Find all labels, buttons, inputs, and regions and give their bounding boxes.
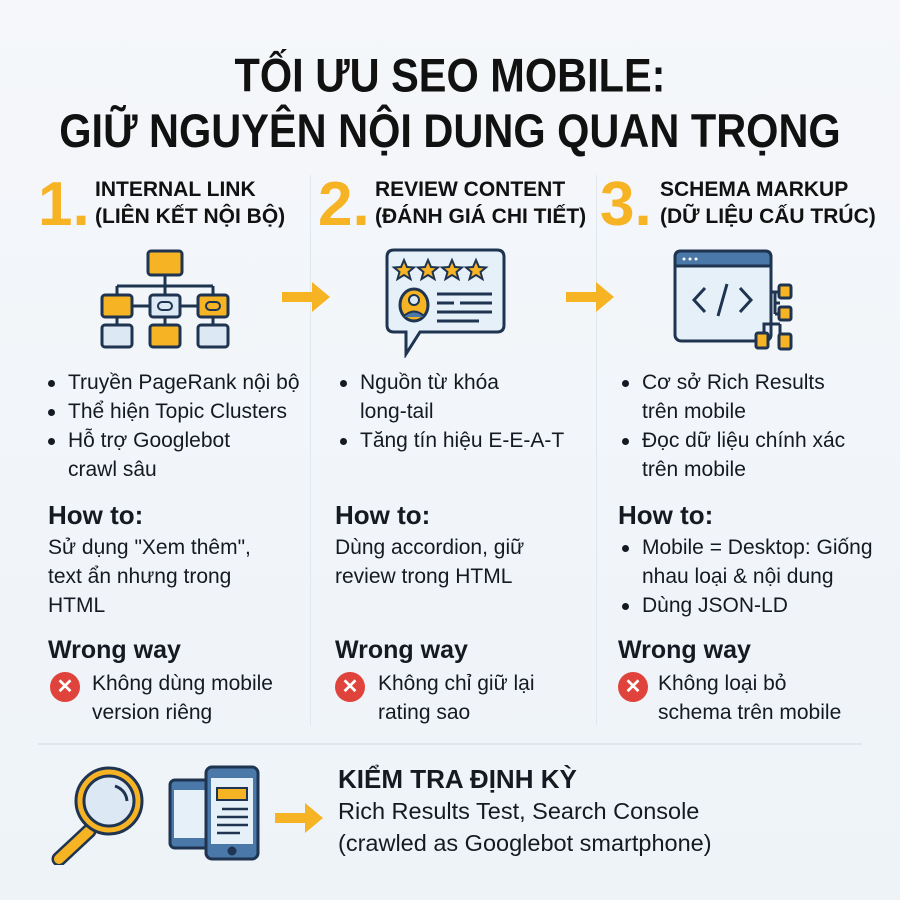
column separators: [310, 175, 311, 725]
arrow 1: [282, 282, 330, 312]
bullets 3: [622, 371, 845, 481]
text: periodic check: Rich Results Test, Search Console: [338, 798, 699, 824]
how to 1: [48, 500, 251, 617]
text: periodic check: [338, 764, 712, 856]
bullets 1: Hỗ trợ Googlebot: [68, 429, 230, 452]
icon: magnifier: [52, 766, 144, 865]
panel: internal link: version riêng: [92, 701, 212, 724]
icon: code window with tree: [674, 250, 792, 350]
bullets 2: Tăng tín hiệu E-E-A-T: [360, 429, 564, 452]
how to 2: review trong HTML: [335, 565, 512, 588]
how to 3: [618, 500, 873, 617]
how to 3: nhau loại & nội dung: [642, 565, 834, 588]
panel: internal link: [38, 170, 300, 724]
how to 3: How to:: [618, 500, 713, 530]
how to 1: HTML: [48, 594, 105, 617]
how to 1: Sử dụng "Xem thêm",: [48, 536, 251, 559]
wrong way 3: [618, 636, 841, 724]
how to 2: How to:: [335, 500, 430, 530]
panel: internal link: ✕: [57, 676, 73, 698]
how to 1: How to:: [48, 500, 143, 530]
how to 2: Dùng accordion, giữ: [335, 536, 524, 559]
heading 3: (DỮ LIỆU CẤU TRÚC): [660, 205, 876, 228]
title: [59, 48, 841, 157]
heading 3: [660, 178, 876, 228]
icon: site hierarchy: [100, 250, 230, 348]
bullets 3: Cơ sở Rich Results: [642, 371, 825, 394]
title: GIỮ NGUYÊN NỘI DUNG QUAN TRỌNG: [59, 103, 841, 157]
heading 2: REVIEW CONTENT: [375, 178, 565, 201]
how to 3: Mobile = Desktop: Giống: [642, 536, 873, 559]
arrow 2: [566, 282, 614, 312]
bullets 1: crawl sâu: [68, 458, 157, 481]
bullets 3: Đọc dữ liệu chính xác: [642, 429, 845, 452]
heading 1: INTERNAL LINK: [95, 178, 256, 201]
panel: internal link: Không dùng mobile: [92, 672, 273, 695]
wrong way 2: Wrong way: [335, 636, 468, 664]
bullets 2: long-tail: [360, 400, 434, 423]
heading 1: [95, 178, 285, 228]
bullets 3: trên mobile: [642, 400, 746, 423]
wrong way 1: Wrong way: [48, 636, 181, 664]
panel: schema markup: schema trên mobile: [658, 701, 841, 724]
text: periodic check: (crawled as Googlebot smartphone): [338, 830, 712, 856]
bullets 2: [340, 371, 564, 452]
panel: schema markup: [600, 170, 876, 724]
heading 3: SCHEMA MARKUP: [660, 178, 848, 201]
bullets 2: Nguồn từ khóa: [360, 371, 499, 394]
panel: review content: Không chỉ giữ lại: [378, 672, 534, 695]
how to 1: text ẩn nhưng trong: [48, 565, 231, 588]
bottom: periodic check: [52, 764, 712, 865]
arrow 3: [275, 803, 323, 833]
number 3: 3.: [600, 170, 652, 239]
bullets 1: Thể hiện Topic Clusters: [68, 400, 287, 423]
wrong way 1: [48, 636, 273, 724]
heading 2: (ĐÁNH GIÁ CHI TIẾT): [375, 205, 586, 228]
how to 3: Dùng JSON-LD: [642, 594, 788, 617]
bullets 1: Truyền PageRank nội bộ: [68, 371, 300, 394]
panel: schema markup: Không loại bỏ: [658, 672, 786, 695]
number 2: 2.: [318, 170, 370, 239]
wrong way 3: Wrong way: [618, 636, 751, 664]
wrong way 2: [335, 636, 534, 724]
number 1: 1.: [38, 170, 90, 239]
panel: review content: rating sao: [378, 701, 470, 724]
heading 2: [375, 178, 586, 228]
how to 2: [335, 500, 524, 588]
icon: review bubble: [386, 248, 506, 358]
panel: schema markup: ✕: [625, 676, 641, 698]
bullets 1: [48, 371, 300, 481]
icon: phones: [168, 766, 260, 860]
text: periodic check: KIỂM TRA ĐỊNH KỲ: [338, 764, 577, 794]
title: TỐI ƯU SEO MOBILE:: [234, 48, 666, 102]
panel: review content: ✕: [342, 676, 358, 698]
bullets 3: trên mobile: [642, 458, 746, 481]
heading 1: (LIÊN KẾT NỘI BỘ): [95, 205, 285, 228]
panel: review content: [318, 170, 586, 724]
